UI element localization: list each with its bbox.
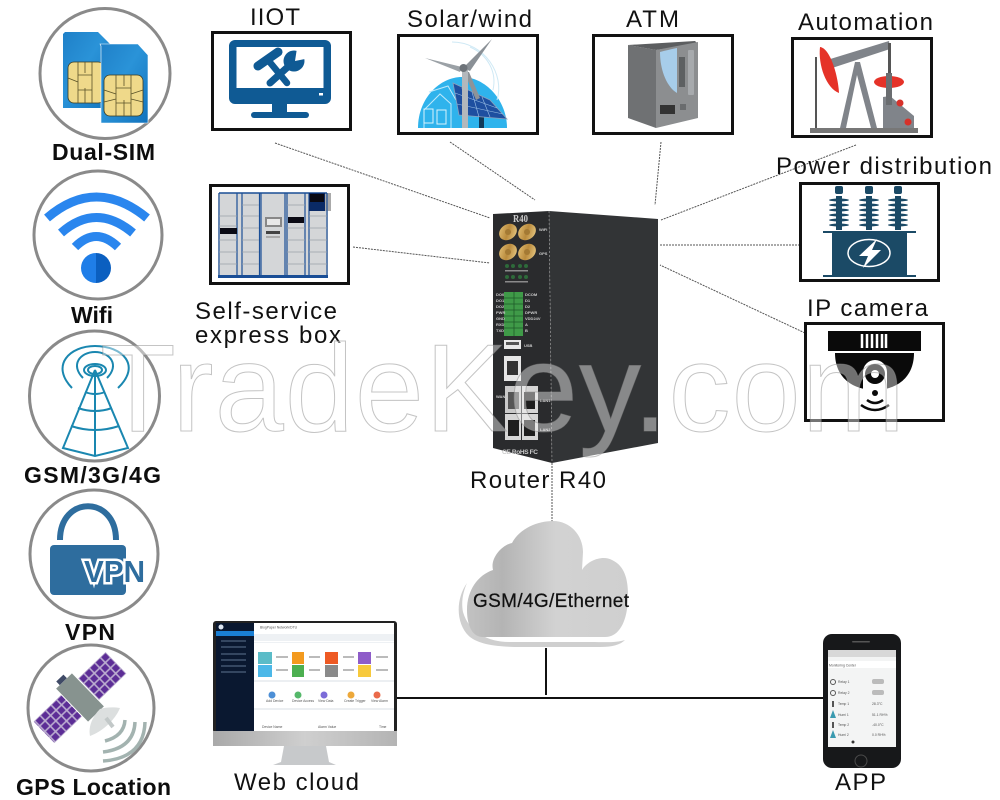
USB port: USB — [524, 343, 533, 348]
label: Wifi: Wifi — [71, 302, 113, 328]
wrench — [270, 48, 310, 83]
label: Router R40: Router R40 — [470, 467, 606, 494]
dashboard main: Device Access — [292, 699, 314, 703]
dashboard main: View Data — [318, 699, 334, 703]
icon: satellite — [25, 643, 145, 761]
label: Dual-SIM: Dual-SIM — [52, 139, 155, 165]
terminal block: PWR — [496, 310, 505, 315]
heading: Power distribution: Power distribution — [776, 153, 992, 180]
label: Web cloud: Web cloud — [234, 769, 359, 796]
terminal block: DPWR — [525, 310, 537, 315]
monitor frame — [213, 621, 397, 733]
smartphone app: Humi 1 — [838, 713, 849, 717]
antenna connectors: GPS — [539, 251, 548, 256]
heading: IP camera: IP camera — [807, 295, 929, 322]
console and network ports: LAN2 — [540, 427, 551, 432]
smartphone app: Relay 2 — [838, 691, 850, 695]
feature: VPN — [30, 490, 158, 645]
heading: ATM: ATM — [626, 6, 679, 33]
icon: padlock — [50, 506, 145, 595]
terminal block: D2 — [525, 304, 531, 309]
panel: Power distribution — [776, 153, 992, 280]
USB port — [504, 340, 533, 349]
cloud — [459, 521, 630, 647]
label: VPN: VPN — [65, 619, 115, 645]
label: GPS Location: GPS Location — [16, 774, 171, 800]
icon: dome camera — [828, 331, 921, 410]
smartphone app: -40.0°C — [872, 723, 884, 727]
smartphone app: Humi 2 — [838, 733, 849, 737]
dashboard main — [254, 623, 394, 731]
heading: Solar/wind: Solar/wind — [407, 6, 532, 33]
icon: transformer — [823, 186, 916, 277]
router model text: R40 — [513, 214, 528, 225]
icon: wifi — [47, 197, 147, 283]
monitor chin — [213, 731, 397, 746]
terminal block: DO0 — [496, 292, 505, 297]
smartphone app: 28.3°C — [872, 702, 883, 706]
icon: wind turbine and solar panel — [418, 39, 507, 128]
feature: Dual-SIM — [40, 8, 170, 165]
network lines — [397, 648, 823, 698]
hammer — [258, 52, 287, 83]
dashboard main: Alarm Value — [318, 725, 336, 729]
connector lines to router — [275, 142, 856, 522]
dashboard main: Add Device — [266, 699, 283, 703]
terminal block: GND — [496, 316, 505, 321]
web cloud monitor — [213, 621, 397, 765]
label: APP: APP — [835, 769, 886, 796]
smartphone app: Monitoring Center — [829, 664, 857, 668]
icon: monitor with tools — [229, 40, 331, 118]
terminal block: DO1 — [496, 298, 505, 303]
watermark: TradeKey.com — [100, 320, 905, 458]
feature: Wifi — [34, 171, 162, 328]
cloud shadow crescent — [459, 583, 625, 647]
dashboard main: Device Name — [262, 725, 282, 729]
panel: Solar/wind — [398, 6, 538, 134]
monitor stand — [273, 746, 336, 765]
dashboard main: BlogPaper Network/DTU — [260, 626, 298, 630]
label: GSM/4G/Ethernet: GSM/4G/Ethernet — [473, 591, 630, 612]
smartphone app: Relay 1 — [838, 680, 850, 684]
panel: IIOT — [212, 4, 350, 130]
icon: padlock: VPN — [84, 554, 145, 589]
label: Self-service: Self-service — [195, 298, 337, 325]
certification marks: CE RoHS FC — [502, 449, 538, 456]
console and network ports — [496, 356, 551, 440]
smartphone app: Temp 1 — [838, 702, 849, 706]
feature: GPS Location — [16, 643, 171, 800]
label: express box: express box — [195, 322, 341, 349]
terminal block: A — [525, 322, 528, 327]
label: GSM/3G/4G: GSM/3G/4G — [24, 462, 161, 488]
panel: ATM — [594, 6, 732, 134]
icon: SIM cards — [63, 32, 148, 123]
dashboard sidebar — [216, 623, 254, 731]
console and network ports: LAN1 — [540, 398, 551, 403]
terminal block: VDD24V — [525, 316, 541, 321]
cloud body — [467, 521, 628, 637]
icon: ATM machine — [628, 41, 698, 128]
terminal block — [496, 292, 541, 336]
terminal block: B — [525, 328, 528, 333]
panel: Self-service express box — [195, 186, 348, 349]
smartphone app: 51.1 RH% — [872, 713, 887, 717]
status LEDs — [505, 264, 528, 282]
icon: parcel lockers — [218, 193, 331, 278]
panel: Automation — [792, 9, 933, 136]
heading: Automation: Automation — [798, 9, 933, 36]
dashboard main: Time — [379, 725, 387, 729]
antenna connectors: WiFi — [539, 227, 547, 232]
console and network ports: WAN — [496, 394, 505, 399]
terminal block: DO2 — [496, 304, 505, 309]
terminal block: DCOM — [525, 292, 538, 297]
terminal block: RXD — [496, 322, 505, 327]
antenna connectors — [496, 220, 548, 264]
feature: GSM/3G/4G — [24, 331, 161, 488]
terminal block: TXD — [496, 328, 504, 333]
smartphone app — [823, 634, 901, 768]
smartphone app: 0.0 RH% — [872, 733, 886, 737]
icon: cell tower — [63, 346, 129, 456]
icon: pumpjack — [810, 41, 918, 133]
smartphone app: Temp 2 — [838, 723, 849, 727]
dashboard main: Create Trigger — [344, 699, 367, 703]
dashboard main: View Alarm — [371, 699, 388, 703]
heading: IIOT: IIOT — [250, 4, 300, 31]
terminal block: D1 — [525, 298, 531, 303]
router R40 — [493, 211, 658, 463]
panel: IP camera — [806, 295, 944, 420]
router body — [493, 211, 658, 463]
